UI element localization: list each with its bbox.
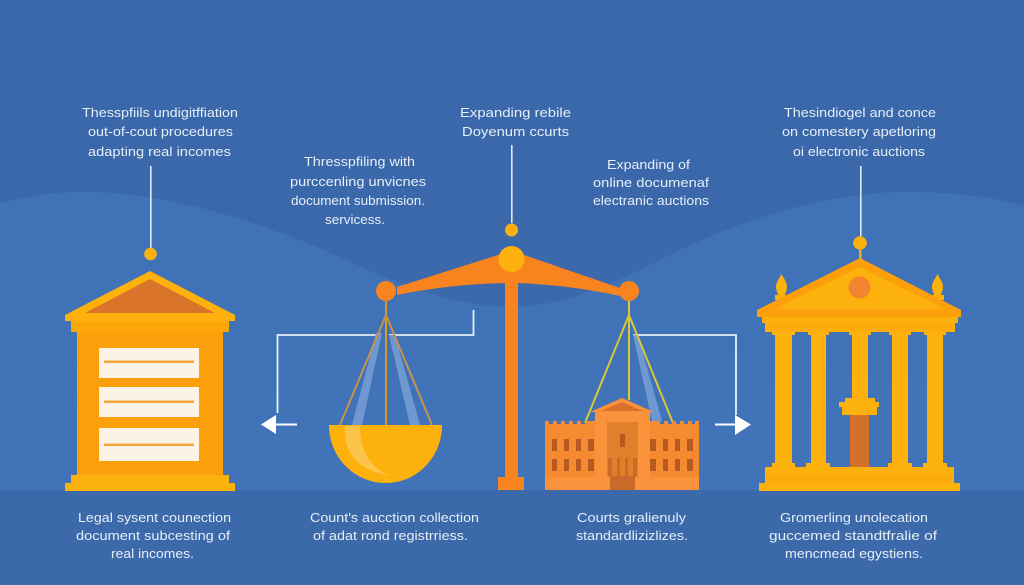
text: left top caption: out-of-cout procedures xyxy=(88,124,234,139)
text: fourth top caption: Expanding of xyxy=(607,157,690,172)
text: right bottom caption: Gromerling unolecation xyxy=(780,510,928,525)
panel: left courthouse xyxy=(65,105,238,561)
text: centre top caption: Expanding rebile xyxy=(460,105,571,120)
icon: document building xyxy=(65,271,235,491)
text: centre-left bottom caption: of adat rond registrriess. xyxy=(313,528,468,543)
left pivot xyxy=(376,281,396,301)
panel: right temple xyxy=(757,105,961,561)
text: second top caption: document submission. xyxy=(291,193,425,208)
text: centre-left bottom caption xyxy=(310,510,479,543)
text: second top caption: purccenling unvicnes xyxy=(290,174,427,189)
text: left bottom caption: document subcesting of xyxy=(76,528,230,543)
text: centre-right bottom caption xyxy=(576,510,688,543)
text: centre-right bottom caption: standardlizizlizes. xyxy=(576,528,688,543)
text: left top caption xyxy=(82,105,238,159)
finials xyxy=(775,274,944,300)
text: fourth top caption: electranic auctions xyxy=(593,193,710,208)
text: right bottom caption: guccemed standtfralie of xyxy=(769,528,937,543)
text: centre top caption xyxy=(460,105,571,139)
right pan: courthouse xyxy=(545,301,699,490)
text: centre top caption: Doyenum ccurts xyxy=(462,124,570,139)
text: fourth top caption xyxy=(593,157,710,208)
text: right top caption: on comestery apetloring xyxy=(782,124,936,139)
text: left bottom caption: Legal sysent counection xyxy=(78,510,231,525)
connector arrow: left xyxy=(261,310,474,434)
text: second top caption xyxy=(290,154,427,227)
text: right top caption: Thesindiogel and conce xyxy=(784,105,936,120)
text: centre-left bottom caption: Count's aucction collection xyxy=(310,510,479,525)
icon: columned temple xyxy=(757,258,961,491)
left pan xyxy=(329,301,442,483)
icon: balance scale xyxy=(329,145,699,490)
text: right top caption xyxy=(782,105,936,159)
text: second top caption: servicess. xyxy=(325,212,385,227)
text: left top caption: Thesspfiils undigitffiation xyxy=(82,105,238,120)
right pivot xyxy=(619,281,639,301)
centre pivot xyxy=(498,246,524,272)
text: right bottom caption xyxy=(769,510,937,561)
scale post and foot xyxy=(498,262,524,490)
text: left top caption: adapting real incomes xyxy=(88,144,232,159)
text: left bottom caption xyxy=(76,510,231,561)
text: left bottom caption: real incomes. xyxy=(111,546,194,561)
text: second top caption: Thresspfiling with xyxy=(304,154,415,169)
text: fourth top caption: online documenaf xyxy=(593,175,709,190)
text: right bottom caption: mencmead egystiens. xyxy=(785,546,923,561)
scale beam xyxy=(397,255,620,296)
text: centre-right bottom caption: Courts gralienuly xyxy=(577,510,687,525)
connector arrow: right xyxy=(633,335,751,435)
scale callout line and dot xyxy=(505,145,518,236)
callout line and dot xyxy=(144,166,157,260)
temple callout line and dot xyxy=(853,166,867,259)
text: right top caption: oi electronic auctions xyxy=(793,144,926,159)
